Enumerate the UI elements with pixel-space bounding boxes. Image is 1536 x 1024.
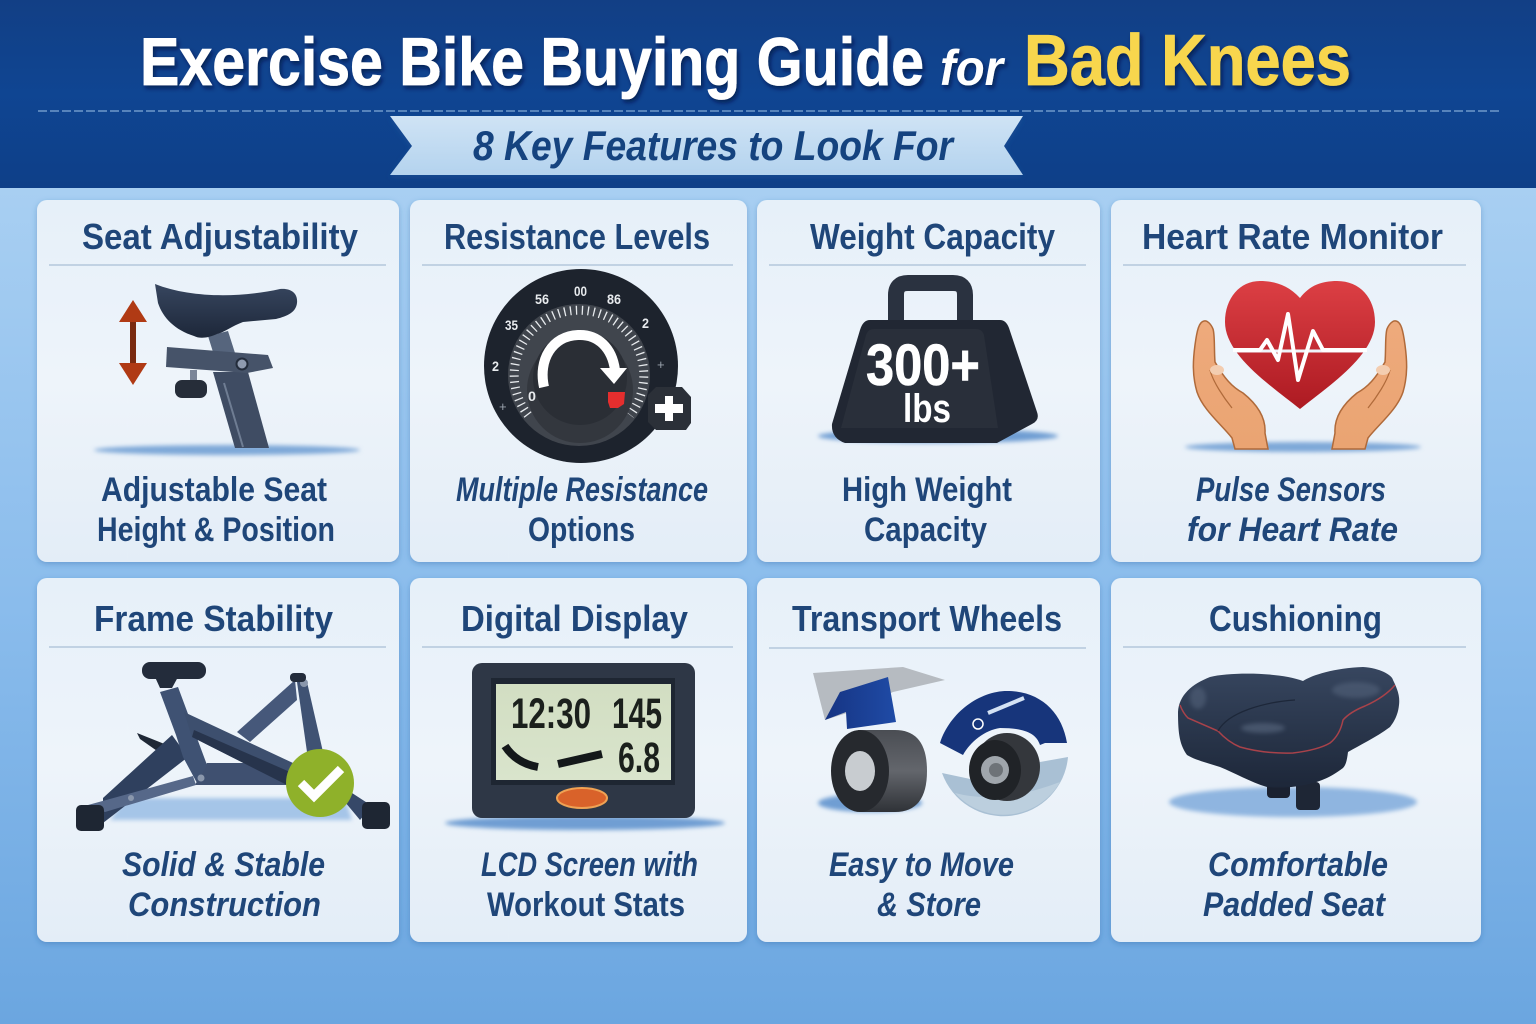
caption: frame stability: Construction: [128, 886, 321, 924]
icon: 300+ lbs weight: 300+: [866, 333, 980, 398]
header band: [0, 0, 1536, 188]
icon: resistance dial: 86: [607, 291, 621, 307]
panel: frame stability: [37, 578, 399, 942]
icon: resistance dial: 0: [528, 388, 536, 404]
icon: resistance dial: 56: [535, 291, 549, 307]
heading: weight capacity: Weight Capacity: [810, 216, 1055, 257]
subtitle ribbon: 8 Key Features to Look For: [473, 122, 955, 169]
caption: weight capacity: High Weight: [842, 471, 1012, 509]
caption: heart rate monitor: for Heart Rate: [1187, 511, 1398, 549]
caption: seat adjustability: Height & Position: [97, 511, 335, 549]
caption: resistance levels: Options: [528, 511, 635, 549]
caption: cushioning: [1203, 846, 1388, 924]
panel: weight capacity: [757, 200, 1100, 562]
panel: heart rate monitor: [1111, 200, 1481, 562]
panel: seat adjustability: [37, 200, 399, 562]
title: for: [940, 40, 1005, 96]
caption: weight capacity: [842, 471, 1012, 549]
heading: digital display: Digital Display: [461, 598, 688, 639]
heading: resistance levels: Resistance Levels: [444, 216, 710, 257]
caption: digital display: [481, 846, 698, 924]
heading: seat adjustability: Seat Adjustability: [82, 216, 358, 257]
caption: cushioning: Padded Seat: [1203, 886, 1386, 924]
panel: transport wheels: [757, 578, 1100, 942]
icon: resistance dial: +: [657, 357, 665, 372]
heading: transport wheels: Transport Wheels: [792, 598, 1062, 639]
caption: transport wheels: Easy to Move: [829, 846, 1014, 884]
icon: resistance dial: 00: [574, 283, 587, 299]
icon: resistance dial: [484, 269, 691, 463]
icon: 300+ lbs weight: lbs: [903, 387, 951, 431]
icon: padded seat: [1169, 667, 1417, 817]
panel: resistance levels: [410, 200, 747, 562]
caption: resistance levels: Multiple Resistance: [456, 471, 708, 509]
icon: heart held by hands: [1185, 281, 1421, 452]
icon: LCD display: 12:30: [511, 690, 591, 738]
icon: LCD display: 145: [612, 690, 662, 738]
icon: resistance dial: 2: [642, 315, 649, 331]
icon: LCD display: [445, 663, 725, 830]
caption: frame stability: [122, 846, 325, 924]
icon: LCD display: 6.8: [618, 734, 660, 782]
caption: heart rate monitor: [1187, 471, 1398, 549]
caption: cushioning: Comfortable: [1208, 846, 1388, 884]
caption: seat adjustability: Adjustable Seat: [101, 471, 327, 509]
caption: heart rate monitor: Pulse Sensors: [1196, 471, 1386, 509]
icon: resistance dial: 35: [505, 317, 518, 333]
icon: bike frame with check: [76, 662, 390, 831]
icon: resistance dial: +: [499, 399, 507, 414]
caption: resistance levels: [456, 471, 708, 549]
icon: resistance dial: 2: [492, 358, 499, 374]
icon: transport wheels: [813, 667, 1068, 816]
caption: transport wheels: [829, 846, 1014, 924]
title: Bad Knees: [1024, 21, 1351, 101]
heading: frame stability: Frame Stability: [94, 598, 333, 639]
title: Exercise Bike Buying Guide: [140, 24, 924, 100]
panel: cushioning: [1111, 578, 1481, 942]
heading: cushioning: Cushioning: [1209, 598, 1382, 639]
caption: digital display: Workout Stats: [487, 886, 685, 924]
caption: transport wheels: & Store: [877, 886, 981, 924]
heading: heart rate monitor: Heart Rate Monitor: [1142, 216, 1443, 257]
caption: weight capacity: Capacity: [864, 511, 987, 549]
panel: digital display: [410, 578, 747, 942]
caption: digital display: LCD Screen with: [481, 846, 698, 884]
icon: 300+ lbs weight: [818, 283, 1058, 443]
caption: seat adjustability: [97, 471, 335, 549]
icon: adjustable seat post: [94, 284, 360, 455]
caption: frame stability: Solid & Stable: [122, 846, 325, 884]
subtitle ribbon: [390, 116, 1023, 175]
